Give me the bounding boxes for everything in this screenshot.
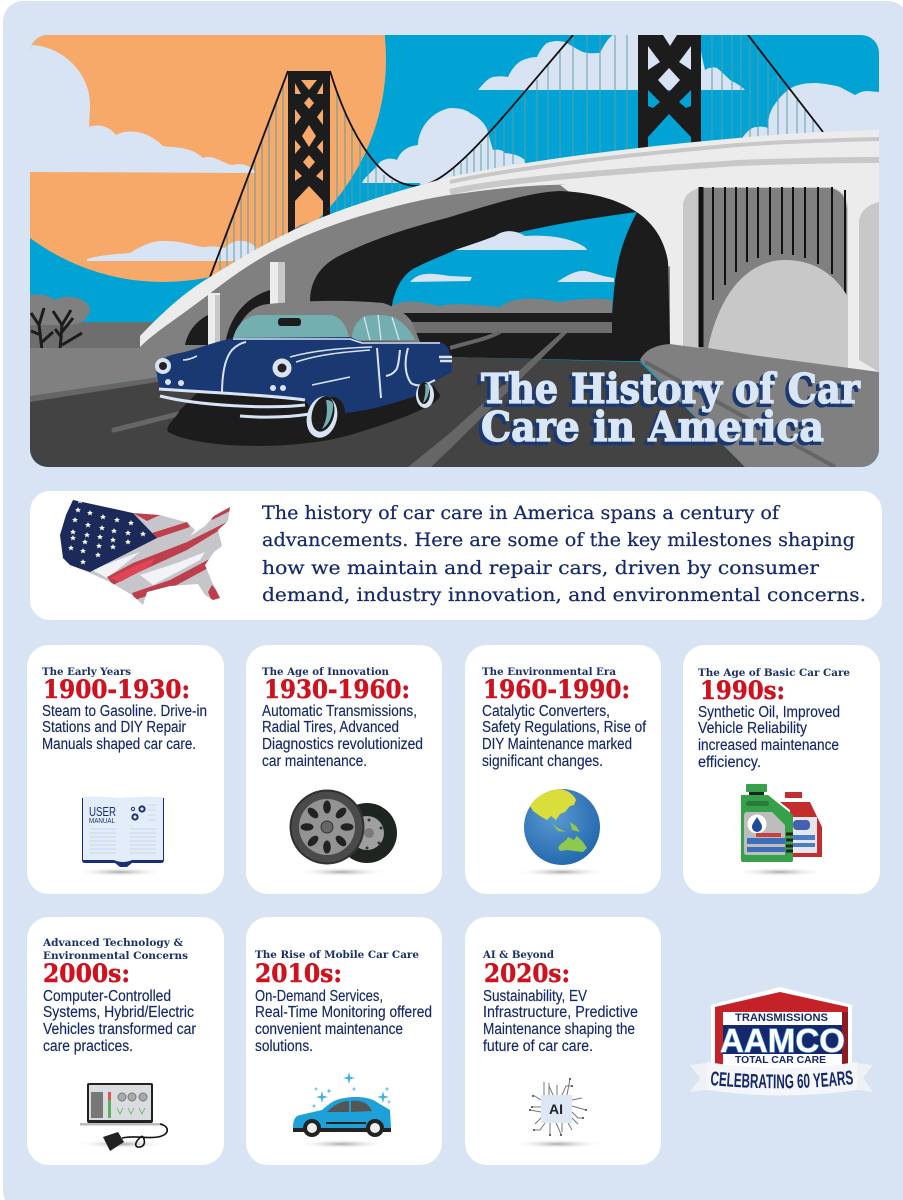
subtitle: The Environmental Era <box>482 666 616 678</box>
panel: the environmental era <box>465 645 661 894</box>
description: Manuals shaped car care. <box>42 736 196 753</box>
panel: the age of innovation <box>246 645 442 894</box>
description: Safety Regulations, Rise of <box>482 719 647 736</box>
clouds <box>30 35 879 261</box>
years: 1900-1930: <box>43 675 190 705</box>
main cables <box>210 35 823 277</box>
description <box>255 988 432 1055</box>
icon: AI chip: AI <box>549 1101 563 1117</box>
intro text: how we maintain and repair cars, driven by consumer <box>262 558 819 579</box>
description: Real-Time Monitoring offered <box>255 1004 432 1021</box>
sun <box>30 35 386 282</box>
description <box>482 703 647 770</box>
description: future of car care. <box>483 1038 593 1055</box>
road <box>30 332 745 467</box>
description: convenient maintenance <box>255 1021 403 1038</box>
intro text: The history of car care in America spans a century of <box>262 503 780 524</box>
icon: user manual: MANUAL <box>89 816 115 825</box>
panel: the rise of mobile car care <box>246 917 442 1165</box>
description: Synthetic Oil, Improved <box>698 704 840 721</box>
logo: AAMCO celebrating 60 years: TRANSMISSIONS <box>735 1012 828 1024</box>
icon: user manual <box>74 797 166 876</box>
description: Computer-Controlled <box>43 988 171 1005</box>
clouds under the arch <box>410 231 614 282</box>
icon: laptop diagnostics <box>76 1083 168 1151</box>
icon: USA map with flag <box>60 500 230 605</box>
description: DIY Maintenance marked <box>482 736 632 753</box>
description: care practices. <box>43 1038 133 1055</box>
title: Care in America <box>478 406 821 454</box>
description: Systems, Hybrid/Electric <box>43 1004 194 1021</box>
description: Vehicle Reliability <box>698 720 807 737</box>
description <box>698 704 840 771</box>
icon: globe <box>516 789 608 876</box>
subtitle: Advanced Technology & <box>42 937 184 949</box>
panel: advanced technology <box>27 917 224 1165</box>
description: efficiency. <box>698 754 761 771</box>
description <box>43 988 196 1055</box>
logo: AAMCO celebrating 60 years: AAMCO <box>720 1022 845 1059</box>
right bridge bay with stripes <box>683 187 879 372</box>
subtitle: Environmental Concerns <box>43 950 188 962</box>
subtitle: AI & Beyond <box>482 949 555 961</box>
description: Stations and DIY Repair <box>42 719 186 736</box>
panel: AI and beyond <box>465 917 661 1165</box>
classic blue car <box>155 301 452 446</box>
intro text: advancements. Here are some of the key milestones shaping <box>262 530 855 551</box>
description: On-Demand Services, <box>255 988 383 1005</box>
description: Infrastructure, Predictive <box>483 1004 638 1021</box>
logo: AAMCO celebrating 60 years <box>690 987 873 1096</box>
years: 2020s: <box>484 959 570 989</box>
description: Steam to Gasoline. Drive-in <box>42 703 207 720</box>
description: increased maintenance <box>698 737 839 754</box>
subtitle: The Age of Basic Car Care <box>698 667 850 679</box>
description: Diagnostics revolutionized <box>262 736 423 753</box>
description: Catalytic Converters, <box>482 703 610 720</box>
years: 2010s: <box>255 959 342 989</box>
intro text: demand, industry innovation, and environmental concerns. <box>262 585 866 606</box>
years: 1990s: <box>700 676 785 706</box>
description: car maintenance. <box>262 753 367 770</box>
subtitle: The Age of Innovation <box>262 666 389 678</box>
description: solutions. <box>255 1038 313 1055</box>
bridge body <box>140 130 879 400</box>
title: Care in America <box>481 403 824 451</box>
panel: the early years <box>27 645 224 894</box>
title: The History of Car <box>478 368 858 416</box>
icon: tires <box>290 790 397 876</box>
panel: introduction <box>30 490 882 620</box>
hero illustration: bridge and classic car <box>30 35 879 467</box>
description: Maintenance shaping the <box>483 1021 635 1038</box>
description <box>42 703 207 753</box>
years: 1960-1990: <box>483 675 630 705</box>
landscape left <box>30 294 160 350</box>
logo: AAMCO celebrating 60 years: TOTAL CAR CARE <box>735 1055 826 1066</box>
subtitle: The Rise of Mobile Car Care <box>255 949 419 961</box>
description: Automatic Transmissions, <box>262 703 417 720</box>
left bridge tower <box>288 71 330 240</box>
intro text <box>262 503 866 606</box>
subtitle: The Early Years <box>42 666 131 678</box>
description: Sustainability, EV <box>483 988 588 1005</box>
title <box>478 365 861 454</box>
icon: oil bottles <box>734 784 826 876</box>
years: 2000s: <box>43 959 130 989</box>
icon: user manual: USER <box>89 804 116 819</box>
subtitle <box>42 937 188 962</box>
title: The History of Car <box>481 365 861 413</box>
foreground guardrail road <box>640 344 879 467</box>
logo: AAMCO celebrating 60 years: CELEBRATING 60 YEARS <box>711 1070 853 1088</box>
icon: AI chip <box>512 1078 604 1148</box>
description <box>483 988 638 1055</box>
years: 1930-1960: <box>264 675 410 705</box>
description: Radial Tires, Advanced <box>262 719 399 736</box>
distant treeline <box>392 299 612 333</box>
description: significant changes. <box>482 753 603 770</box>
icon: clean blue car with sparkles <box>293 1072 391 1148</box>
description <box>262 703 423 770</box>
panel: the age of basic car care <box>683 645 880 894</box>
description: Vehicles transformed car <box>43 1021 196 1038</box>
right bridge tower <box>638 35 701 155</box>
bridge suspender cables <box>220 35 813 271</box>
